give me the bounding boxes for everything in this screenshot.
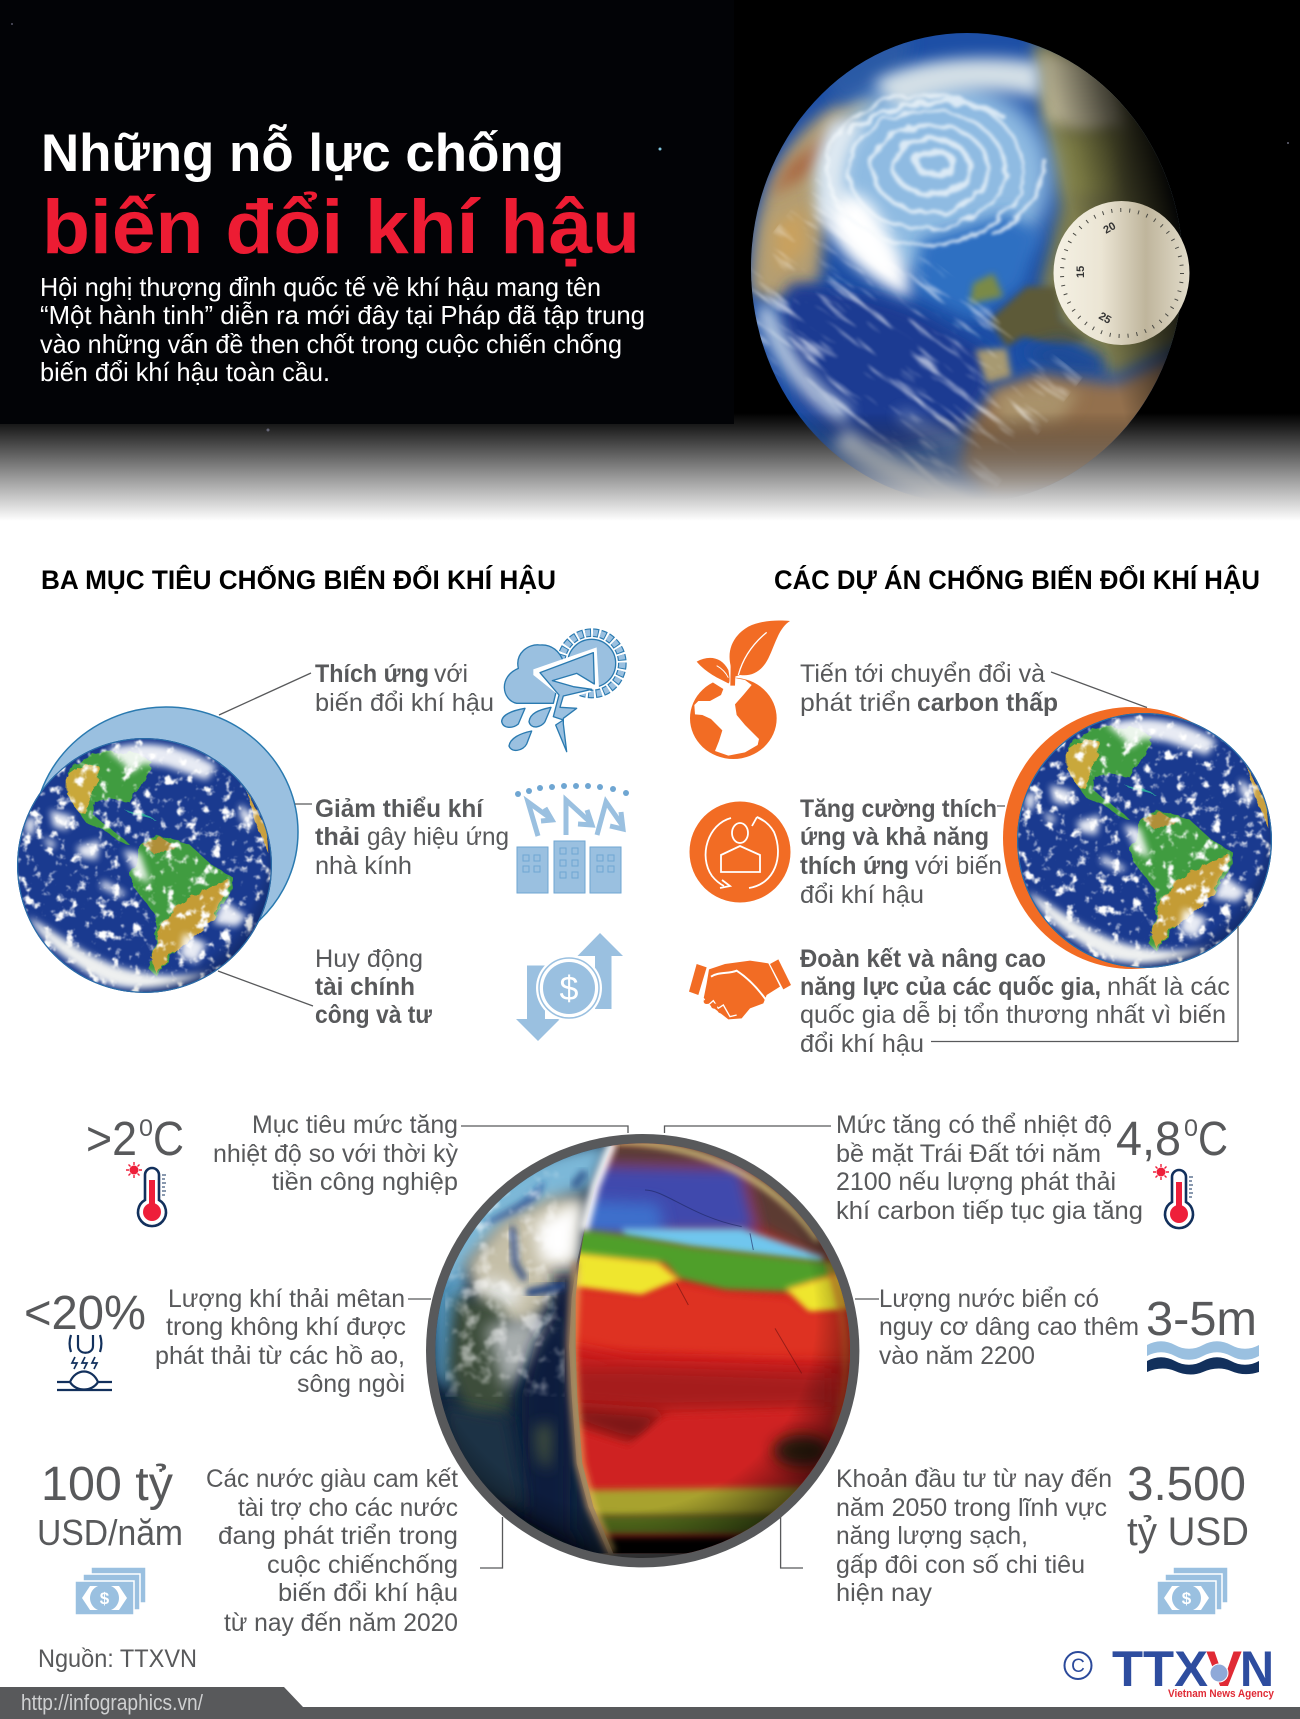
earth half bbox=[435, 1146, 612, 1554]
description: Mục tiêu mức tăng bbox=[252, 1111, 458, 1139]
logo: TTXVN bbox=[1064, 1641, 1275, 1700]
callout: methane bbox=[24, 1285, 431, 1398]
dial: 25 bbox=[1096, 310, 1113, 327]
intro text: “Một hành tinh” diễn ra mới đây tại Pháp đã tập trung bbox=[40, 300, 645, 330]
description bbox=[213, 1111, 458, 1196]
callout: 100 billion: đang phát triển trong bbox=[218, 1522, 458, 1550]
callout: 100 billion: từ nay đến năm 2020 bbox=[224, 1609, 458, 1637]
logo: TTXVN: TTX bbox=[1112, 1641, 1208, 1697]
icon: thermometer bbox=[1153, 1164, 1193, 1228]
logo: TTXVN: Vietnam News Agency bbox=[1168, 1688, 1275, 1700]
text: adaptation: biến đổi khí hậu bbox=[315, 689, 494, 717]
dial: 20 bbox=[1102, 220, 1118, 237]
icon: waves bbox=[1147, 1341, 1259, 1375]
callout: 4.8 degrees: khí carbon tiếp tục gia tăng bbox=[836, 1197, 1143, 1225]
callout: 100 billion bbox=[37, 1458, 502, 1637]
intro text: biến đổi khí hậu toàn cầu. bbox=[40, 357, 330, 387]
text: adaptation: với bbox=[434, 660, 468, 688]
text: mitigation bbox=[315, 795, 509, 880]
header background bbox=[0, 0, 1300, 521]
callout: clean energy investment: hiện nay bbox=[836, 1579, 932, 1607]
connector lines bbox=[931, 672, 1238, 1042]
icon: handshake bbox=[689, 959, 791, 1019]
callout: 4.8 degrees: C bbox=[1198, 1113, 1228, 1166]
text: resilience: đổi khí hậu bbox=[800, 881, 924, 909]
callout: sea level bbox=[855, 1285, 1259, 1375]
text: low carbon: Tiến tới chuyển đổi và bbox=[800, 660, 1045, 688]
text: mitigation: gây hiệu ứng bbox=[367, 823, 509, 851]
icon: person in circle bbox=[690, 802, 790, 902]
text: solidarity: Đoàn kết và nâng cao bbox=[800, 945, 1046, 973]
title: Những nỗ lực chống bbox=[41, 123, 564, 183]
blue crescent behind earth bbox=[34, 707, 298, 957]
value: >2 bbox=[86, 1113, 137, 1166]
intro text: vào những vấn đề then chốt trong cuộc chiến chống bbox=[40, 329, 622, 359]
callout: 100 billion: biến đổi khí hậu bbox=[278, 1579, 458, 1607]
callout: 4.8 degrees: bề mặt Trái Đất tới năm bbox=[836, 1140, 1101, 1168]
text: resilience bbox=[800, 795, 1002, 909]
stripe between halves bbox=[569, 1145, 613, 1553]
callout: methane: Lượng khí thải mêtan bbox=[168, 1285, 405, 1313]
text: resilience: thích ứng bbox=[800, 852, 909, 880]
footer bar bbox=[0, 1687, 1300, 1719]
hero image: earth with dial bbox=[751, 33, 1190, 494]
globe ring bbox=[426, 1134, 859, 1567]
logo: TTXVN: V bbox=[1206, 1641, 1243, 1697]
callout: methane: <20% bbox=[24, 1287, 146, 1340]
thermal half bbox=[576, 1143, 850, 1554]
text: resilience: Tăng cường thích bbox=[800, 795, 997, 823]
text: finance: Huy động bbox=[315, 945, 423, 973]
earth image right bbox=[1010, 705, 1287, 982]
text: solidarity bbox=[800, 945, 1230, 1058]
text: low carbon bbox=[800, 660, 1058, 717]
callout: 100 billion: 100 tỷ bbox=[41, 1458, 173, 1511]
callout: methane: phát thải từ các hồ ao, bbox=[155, 1342, 405, 1370]
icon: dollar arrows bbox=[516, 933, 623, 1041]
text: adaptation: Thích ứng bbox=[315, 660, 429, 688]
globe edge shading bbox=[435, 1143, 850, 1558]
callout: clean energy investment: gấp đôi con số chi tiêu bbox=[836, 1551, 1085, 1579]
callout: 100 billion: cuộc chiếnchống bbox=[267, 1551, 458, 1579]
icon: thermometer bbox=[126, 1162, 166, 1226]
text: solidarity: đổi khí hậu bbox=[800, 1030, 924, 1058]
text: mitigation: thải bbox=[315, 823, 360, 851]
callout: methane: sông ngòi bbox=[297, 1370, 405, 1398]
callout: clean energy investment bbox=[781, 1458, 1249, 1615]
text: finance bbox=[315, 945, 433, 1029]
connector lines bbox=[218, 673, 313, 1006]
panel: three goals bbox=[10, 633, 629, 1041]
icon: methane bbox=[57, 1335, 112, 1390]
description: nhiệt độ so với thời kỳ bbox=[213, 1140, 458, 1168]
source: Nguồn: TTXVN bbox=[38, 1645, 197, 1673]
title bbox=[41, 123, 640, 270]
panel: central globe bbox=[425, 1130, 862, 1573]
callout: sea level: vào năm 2200 bbox=[879, 1342, 1035, 1370]
callout: clean energy investment: tỷ USD bbox=[1127, 1510, 1249, 1554]
callout: 2 degree target bbox=[86, 1111, 628, 1226]
footer bar: http://infographics.vn/ bbox=[21, 1690, 204, 1715]
callout: 100 billion: Các nước giàu cam kết bbox=[206, 1465, 458, 1493]
dial bbox=[1054, 201, 1190, 345]
text: resilience: ứng và khả năng bbox=[800, 823, 989, 851]
callout: 100 billion: tài trợ cho các nước bbox=[238, 1494, 458, 1522]
callout: methane: trong không khí được bbox=[166, 1313, 406, 1341]
text: mitigation: Giảm thiểu khí bbox=[315, 795, 484, 823]
description: tiền công nghiệp bbox=[272, 1168, 458, 1196]
icon: globe with leaves bbox=[690, 621, 790, 759]
callout: clean energy investment: Khoản đầu tư từ nay đến bbox=[836, 1465, 1112, 1493]
text: solidarity: quốc gia dễ bị tổn thương nhất vì biến bbox=[800, 1000, 1226, 1029]
callout: 4.8 degrees bbox=[664, 1111, 1228, 1228]
callout: 4.8 degrees: Mức tăng có thể nhiệt độ bbox=[836, 1111, 1112, 1139]
icon: money bbox=[75, 1567, 146, 1615]
text: low carbon: phát triển bbox=[800, 689, 911, 717]
icon: dollar arrows: $ bbox=[560, 970, 579, 1008]
callout: 4.8 degrees: 0 bbox=[1184, 1115, 1198, 1142]
callout: clean energy investment: năm 2050 trong lĩnh vực bbox=[836, 1494, 1107, 1522]
text: resilience: với biến bbox=[915, 852, 1002, 880]
callout: 4.8 degrees: 2100 nếu lượng phát thải bbox=[836, 1168, 1116, 1196]
callout: clean energy investment: năng lượng sạch, bbox=[836, 1522, 1028, 1550]
dial: 15 bbox=[1075, 266, 1087, 278]
icon: buildings and emissions bbox=[515, 783, 629, 893]
callout: 100 billion: USD/năm bbox=[37, 1512, 183, 1553]
text: finance: công và tư bbox=[315, 1001, 433, 1029]
text: mitigation: nhà kính bbox=[315, 852, 412, 880]
icon: money bbox=[1157, 1567, 1228, 1615]
text: solidarity: năng lực của các quốc gia, bbox=[800, 973, 1101, 1001]
panel: projects bbox=[689, 621, 1287, 1058]
callout: sea level: nguy cơ dâng cao thêm bbox=[879, 1313, 1139, 1341]
orange crescent behind earth bbox=[1003, 707, 1261, 969]
globe image bbox=[435, 1143, 850, 1558]
callout: sea level: 3-5m bbox=[1146, 1293, 1257, 1346]
callout: clean energy investment: 3.500 bbox=[1127, 1458, 1246, 1511]
icon: storm bbox=[502, 633, 622, 753]
value: 0 bbox=[139, 1115, 153, 1142]
text: adaptation bbox=[315, 660, 494, 717]
callout: 4.8 degrees: 4,8 bbox=[1116, 1113, 1181, 1166]
intro text: Hội nghị thượng đỉnh quốc tế về khí hậu mang tên bbox=[40, 272, 601, 302]
text: low carbon: carbon thấp bbox=[917, 689, 1058, 717]
earth image left bbox=[10, 730, 287, 1007]
logo: TTXVN: C bbox=[1071, 1656, 1085, 1677]
intro text bbox=[40, 272, 645, 387]
callout: sea level: Lượng nước biển có bbox=[879, 1285, 1099, 1313]
value bbox=[86, 1113, 184, 1166]
text: solidarity: nhất là các bbox=[1107, 973, 1230, 1001]
title: biến đổi khí hậu bbox=[42, 185, 640, 270]
logo: TTXVN: N bbox=[1240, 1641, 1274, 1697]
value: C bbox=[153, 1113, 184, 1166]
text: finance: tài chính bbox=[315, 973, 415, 1001]
heading: three goals: BA MỤC TIÊU CHỐNG BIẾN ĐỔI KHÍ HẬU bbox=[41, 563, 556, 595]
heading: projects: CÁC DỰ ÁN CHỐNG BIẾN ĐỔI KHÍ HẬU bbox=[774, 563, 1260, 595]
